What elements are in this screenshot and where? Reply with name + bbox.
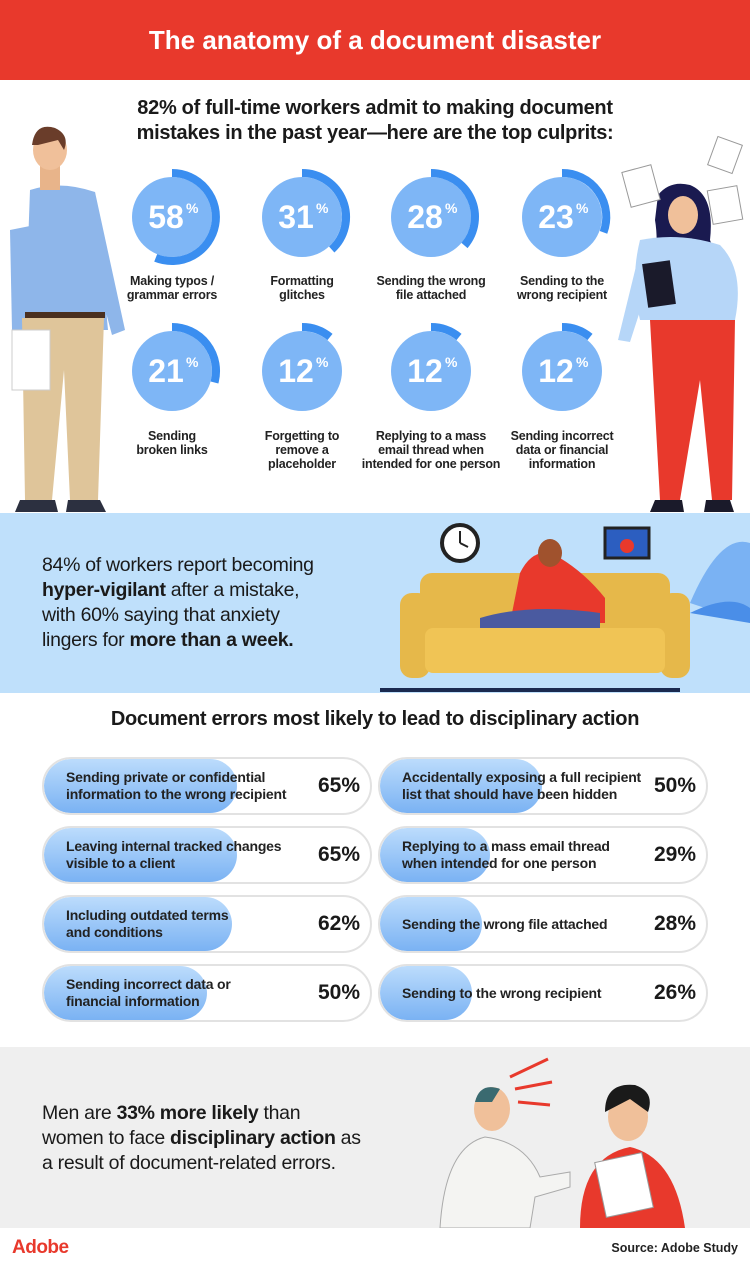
bar: 29% mass email [378, 826, 708, 884]
bar: 65% tracked changes: 65% [318, 843, 360, 866]
labels row 2: Sending [148, 429, 196, 443]
bar: 50% incorrect data [42, 964, 372, 1022]
stat 28% [391, 173, 475, 257]
stat 12% c [522, 327, 602, 411]
header bar: The anatomy of a document disaster [149, 25, 601, 55]
heading: disciplinary action: Document errors most likely to lead to disciplinary action [111, 708, 639, 730]
bar: 28% wrong file: 28% [654, 912, 696, 935]
text: file attached [396, 288, 466, 302]
labels row 1: Making typos / [130, 274, 214, 288]
stat 21%: % [186, 354, 199, 370]
bar: 65% private info: information to the wrong recipient [66, 786, 286, 802]
bar: 50% recipient list: Accidentally exposing a full recipient [402, 769, 641, 785]
subtitle: mistakes in the past year—here are the top culprits: [137, 122, 613, 144]
bar: 62% outdated terms: 62% [318, 912, 360, 935]
labels row 2 [136, 429, 208, 457]
subtitle: 82% of full-time workers admit to making document [137, 97, 613, 119]
bar: 50% incorrect data: Sending incorrect data or [66, 976, 231, 992]
bar list [42, 757, 708, 1022]
text: email thread when [378, 443, 484, 457]
bar: 50% recipient list: 50% [654, 774, 696, 797]
illustration: boss and worker [440, 1058, 685, 1228]
bar: 62% outdated terms: and conditions [66, 924, 163, 940]
stat 58% [132, 173, 216, 261]
text: Formatting [270, 274, 334, 288]
labels row 1 [127, 274, 217, 302]
stat 12% [262, 327, 342, 411]
stat 12% b: 12 [407, 353, 443, 389]
circle stats chart [10, 126, 744, 512]
bar: 62% outdated terms: Including outdated terms [66, 907, 228, 923]
bar: 50% recipient list: list that should have been hidden [402, 786, 617, 802]
text: anxiety stat [42, 554, 314, 651]
bar: 29% mass email: when intended for one person [402, 855, 596, 871]
bar: 65% private info [42, 757, 372, 815]
bar: 50% recipient list [378, 757, 708, 815]
stat 12% c: % [576, 354, 589, 370]
stat 23%: 23 [538, 199, 574, 235]
bar: 29% mass email: 29% [654, 843, 696, 866]
stat 12% b [391, 327, 471, 411]
panel: gender stat [0, 1047, 750, 1228]
bar: 65% tracked changes: Leaving internal tracked changes [66, 838, 281, 854]
text: men stat: women to face disciplinary action as [42, 1127, 361, 1149]
text: men stat [42, 1102, 361, 1174]
stat 58%: % [186, 200, 199, 216]
stat 23% [522, 173, 606, 257]
bar: 29% mass email: Replying to a mass email thread [402, 838, 610, 854]
text: placeholder [268, 457, 336, 471]
header bar [0, 0, 750, 80]
text: data or financial [516, 443, 608, 457]
text: Sending to the [520, 274, 604, 288]
subtitle [137, 97, 613, 144]
text: men stat: Men are 33% more likely than [42, 1102, 300, 1124]
text: anxiety stat: with 60% saying that anxiety [42, 604, 280, 626]
stat 31% [262, 173, 346, 257]
bar: 62% outdated terms [42, 895, 372, 953]
stat 21%: 21 [148, 353, 184, 389]
stat 31%: % [316, 200, 329, 216]
text: Forgetting to [265, 429, 339, 443]
panel: hyper-vigilance band [0, 513, 750, 693]
bar: 50% incorrect data: 50% [318, 981, 360, 1004]
bar: 65% tracked changes [42, 826, 372, 884]
bar: 50% incorrect data: financial information [66, 993, 199, 1009]
illustration: sofa [380, 523, 750, 692]
stat 28%: % [445, 200, 458, 216]
man illustration [10, 127, 125, 512]
stat 12%: 12 [278, 353, 314, 389]
bar: 26% wrong recipient [378, 964, 708, 1022]
text: remove a [275, 443, 329, 457]
stat 58%: 58 [148, 199, 184, 235]
labels row 1: grammar errors [127, 288, 217, 302]
stat 23%: % [576, 200, 589, 216]
stat 21% [132, 327, 216, 411]
bar: 65% private info: Sending private or confidential [66, 769, 265, 785]
text: intended for one person [362, 457, 500, 471]
bar: 65% tracked changes: visible to a client [66, 855, 175, 871]
text: Sending incorrect [511, 429, 613, 443]
bar: 26% wrong recipient: Sending to the wrong recipient [402, 984, 601, 1000]
stat 31%: 31 [278, 199, 314, 235]
text: anxiety stat: hyper-vigilant after a mistake, [42, 579, 299, 601]
woman illustration [618, 136, 743, 512]
text: wrong recipient [517, 288, 607, 302]
stat 28%: 28 [407, 199, 443, 235]
bar: 28% wrong file: Sending the wrong file attached [402, 916, 607, 932]
text: men stat: a result of document-related errors. [42, 1152, 336, 1174]
text: anxiety stat: lingers for more than a week. [42, 629, 293, 651]
labels row 2: broken links [136, 443, 208, 457]
text: Sending the wrong [376, 274, 486, 288]
source note: Source: Adobe Study [611, 1241, 738, 1255]
text: Replying to a mass [376, 429, 486, 443]
bar: 65% private info: 65% [318, 774, 360, 797]
text: information [529, 457, 595, 471]
bar: 26% wrong recipient: 26% [654, 981, 696, 1004]
text: anxiety stat: 84% of workers report becoming [42, 554, 314, 576]
stat 12% b: % [445, 354, 458, 370]
stat 12%: % [316, 354, 329, 370]
bar: 28% wrong file [378, 895, 708, 953]
text: glitches [279, 288, 325, 302]
stat 12% c: 12 [538, 353, 574, 389]
logo: Adobe: Adobe [12, 1237, 69, 1258]
